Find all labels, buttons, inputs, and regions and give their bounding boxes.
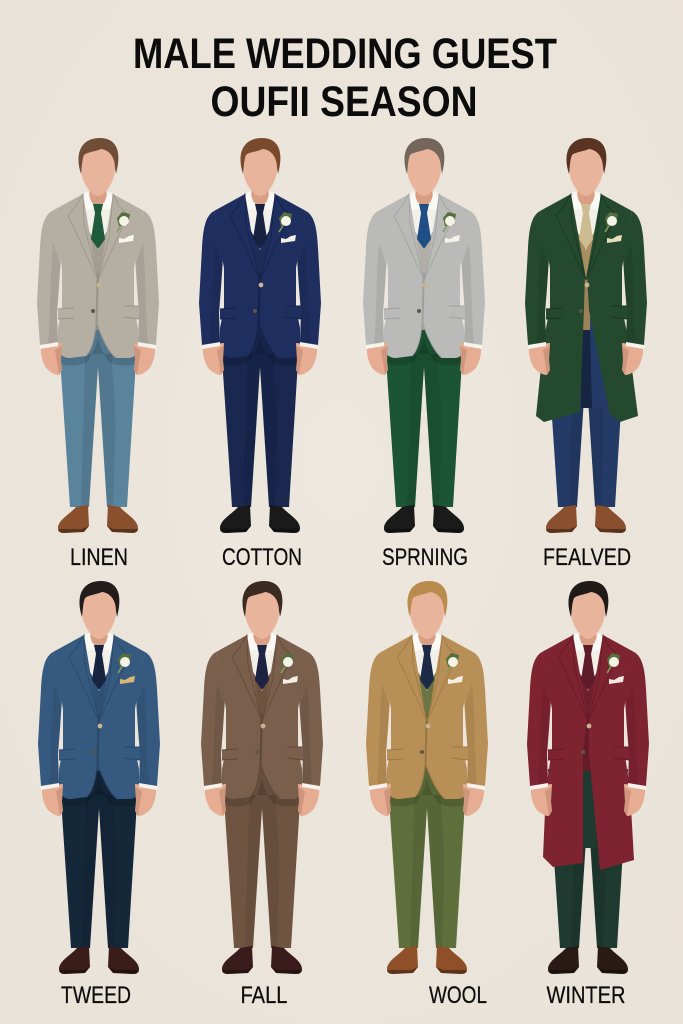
label: tweed: TWEED <box>61 982 131 1009</box>
panel: fealved outfit <box>525 138 647 571</box>
label: fealved: FEALVED <box>543 544 631 571</box>
figure: camel jacket with olive trousers <box>366 581 488 974</box>
label: cotton: COTTON <box>222 544 302 571</box>
figure: navy suit <box>199 138 321 533</box>
label: fall: FALL <box>240 982 288 1009</box>
label: spring: SPRNING <box>382 544 468 571</box>
title: MALE WEDDING GUEST <box>133 30 557 78</box>
figure: linen suit <box>37 138 159 533</box>
figure: brown suit <box>201 581 323 974</box>
panel: spring outfit <box>363 138 485 571</box>
panel: cotton outfit <box>199 138 321 571</box>
label: winter: WINTER <box>546 982 626 1009</box>
figure: grey jacket with green trousers <box>363 138 485 533</box>
panel: fall outfit <box>201 581 323 1009</box>
title: OUFII SEASON <box>210 78 478 126</box>
figure: burgundy long coat <box>527 581 649 974</box>
label: wool: WOOL <box>429 982 487 1009</box>
figure: blue tweed jacket <box>38 581 160 974</box>
figure: green long coat <box>525 138 647 533</box>
title <box>133 30 557 126</box>
panel: winter outfit <box>527 581 649 1009</box>
label: linen: LINEN <box>70 544 128 571</box>
panel: tweed outfit <box>38 581 160 1009</box>
panel: wool outfit <box>366 581 488 1009</box>
panel: linen outfit <box>37 138 159 571</box>
